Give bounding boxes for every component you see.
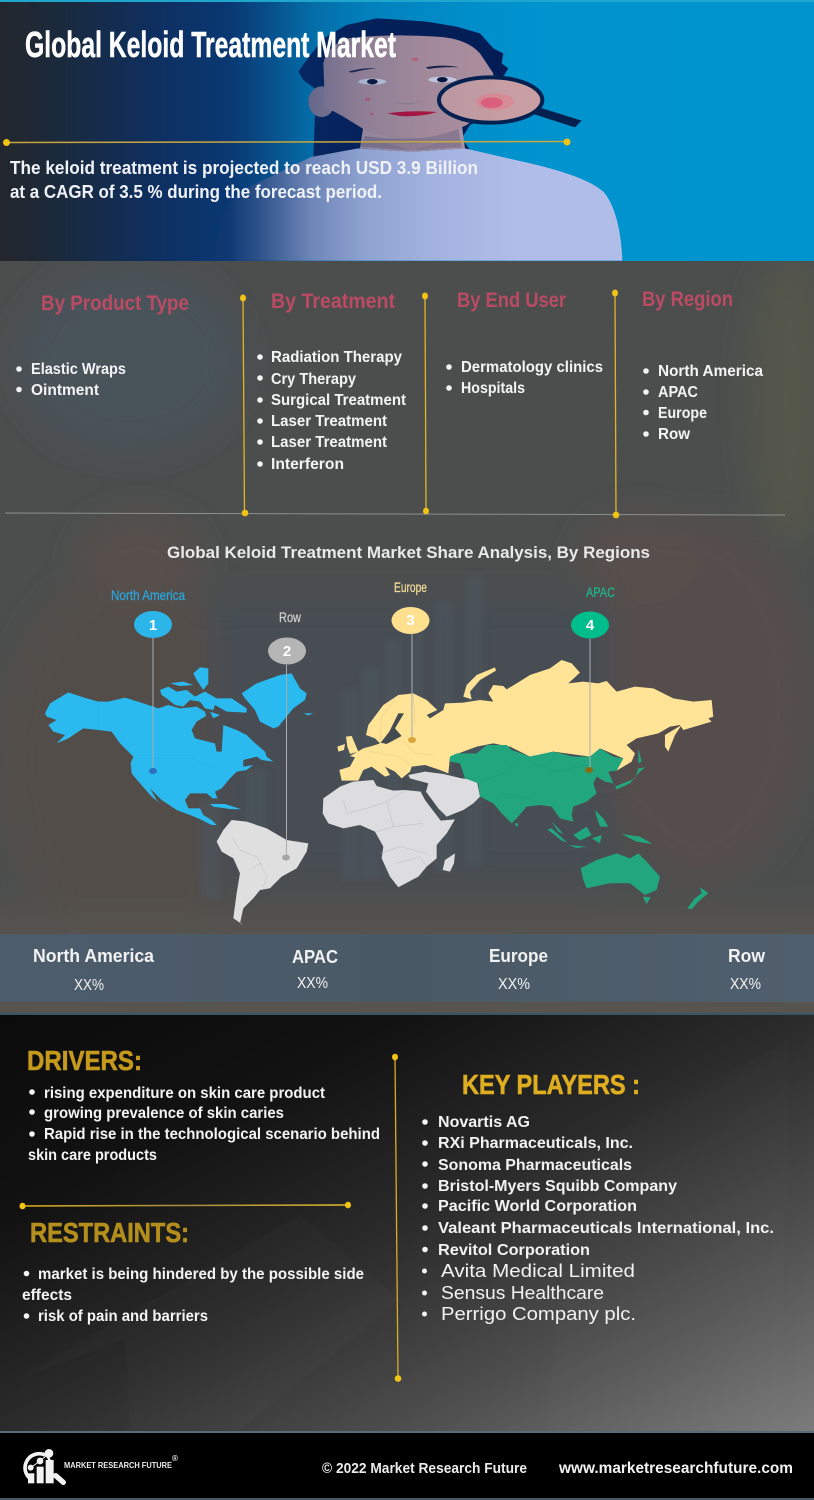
share: Row: XX% xyxy=(730,976,761,993)
share: Europe: Europe xyxy=(489,946,548,966)
list: Row xyxy=(658,426,691,443)
list: Rapid rise in the technological scenario behind xyxy=(44,1126,380,1143)
regional share band xyxy=(0,934,814,1015)
list: Europe xyxy=(658,405,707,422)
list: Interferon xyxy=(271,456,344,473)
share: Row: Row xyxy=(728,946,766,966)
list: Ointment xyxy=(31,382,99,399)
list: skin care products xyxy=(28,1147,157,1164)
list xyxy=(28,1085,380,1164)
share: North America xyxy=(33,946,155,994)
list: Dermatology clinics xyxy=(461,359,603,376)
column: by treatment xyxy=(257,290,406,473)
heading: KEY PLAYERS : xyxy=(462,1069,640,1100)
list xyxy=(22,1266,364,1325)
map regions: Europe, Asia, Africa, Oceania xyxy=(323,660,713,909)
footer bar xyxy=(0,1431,814,1500)
copyright: © 2022 Market Research Future xyxy=(322,1460,527,1477)
share: North America: North America xyxy=(33,946,155,966)
heading: By Region xyxy=(642,288,733,311)
list: Revitol Corporation xyxy=(438,1242,590,1259)
list: risk of pain and barriers xyxy=(38,1308,208,1325)
title: Global Keloid Treatment Market xyxy=(25,24,396,65)
map marker: Europe xyxy=(392,579,430,743)
list: Surgical Treatment xyxy=(271,392,406,409)
market size statement xyxy=(10,158,478,202)
share: Europe xyxy=(489,946,548,993)
drivers xyxy=(27,1045,380,1164)
logo: ® xyxy=(172,1454,178,1463)
list: Elastic Wraps xyxy=(31,361,126,378)
list: Bristol-Myers Squibb Company xyxy=(438,1178,677,1195)
illustration: woman with magnifying glass xyxy=(215,18,622,261)
list: Laser Treatment xyxy=(271,413,387,430)
website: www.marketresearchfuture.com xyxy=(558,1460,793,1477)
panel: drivers, restraints and key players background xyxy=(0,1015,814,1433)
key players xyxy=(422,1069,774,1324)
list: Valeant Pharmaceuticals International, Inc. xyxy=(438,1220,774,1237)
list: rising expenditure on skin care product xyxy=(44,1085,325,1102)
share: APAC xyxy=(292,947,338,992)
market size statement: at a CAGR of 3.5 % during the forecast period. xyxy=(10,182,382,202)
map marker: Row xyxy=(268,609,306,860)
logo: MARKET RESEARCH FUTURE xyxy=(64,1461,173,1470)
list: Laser Treatment xyxy=(271,434,387,451)
column dividers with gold dots xyxy=(5,290,785,518)
map marker: North America xyxy=(111,587,185,774)
list: Perrigo Company plc. xyxy=(441,1303,636,1324)
share: APAC: XX% xyxy=(297,975,328,992)
map marker: APAC: APAC xyxy=(586,584,615,600)
list: Novartis AG xyxy=(438,1114,530,1131)
heading: RESTRAINTS: xyxy=(30,1217,189,1248)
heading: DRIVERS: xyxy=(27,1045,142,1076)
share: Row xyxy=(728,946,766,993)
heading: By End User xyxy=(457,289,566,312)
share: North America: XX% xyxy=(74,977,104,994)
vertical divider xyxy=(392,1054,401,1382)
map marker: APAC xyxy=(571,584,615,773)
map marker: Row: Row xyxy=(279,609,302,625)
map marker: Row: 2 xyxy=(283,643,291,660)
map marker: North America: North America xyxy=(111,587,185,603)
list: RXi Pharmaceuticals, Inc. xyxy=(438,1135,633,1152)
map marker: Europe: Europe xyxy=(394,579,427,595)
list xyxy=(16,361,126,399)
heading: By Product Type xyxy=(41,292,189,315)
list: Avita Medical Limited xyxy=(441,1260,635,1281)
list xyxy=(643,363,763,443)
map marker: Europe: 3 xyxy=(406,612,415,629)
list: North America xyxy=(658,363,763,380)
list: growing prevalence of skin caries xyxy=(44,1105,284,1122)
list xyxy=(257,349,406,473)
panel: hero banner xyxy=(0,0,814,261)
divider with gold end dots xyxy=(3,138,570,146)
list: market is being hindered by the possible side xyxy=(38,1266,364,1283)
divider between drivers and restraints xyxy=(20,1202,351,1209)
map regions: Americas xyxy=(45,667,313,925)
list: effects xyxy=(22,1287,72,1304)
map marker: APAC: 4 xyxy=(586,617,595,634)
world map xyxy=(45,660,713,925)
map heading: Global Keloid Treatment Market Share Analysis, By Regions xyxy=(167,543,650,562)
share: Europe: XX% xyxy=(498,976,530,993)
list: Pacific World Corporation xyxy=(438,1198,637,1215)
list: Cry Therapy xyxy=(271,371,356,388)
heading: By Treatment xyxy=(271,290,395,313)
column: by region xyxy=(642,288,763,443)
map marker: North America: 1 xyxy=(149,617,157,634)
panel: segmentation and map background xyxy=(0,250,814,972)
share: APAC: APAC xyxy=(292,947,338,967)
list: Sonoma Pharmaceuticals xyxy=(438,1157,632,1174)
column: by product type xyxy=(16,292,189,399)
list xyxy=(446,359,603,397)
list: APAC xyxy=(658,384,698,401)
list: Radiation Therapy xyxy=(271,349,402,366)
restraints xyxy=(22,1217,364,1325)
column: by end user xyxy=(446,289,603,397)
list: Sensus Healthcare xyxy=(441,1282,604,1303)
list xyxy=(422,1114,774,1324)
logo xyxy=(25,1449,178,1483)
market size statement: The keloid treatment is projected to reach USD 3.9 Billion xyxy=(10,158,478,178)
list: Hospitals xyxy=(461,380,525,397)
